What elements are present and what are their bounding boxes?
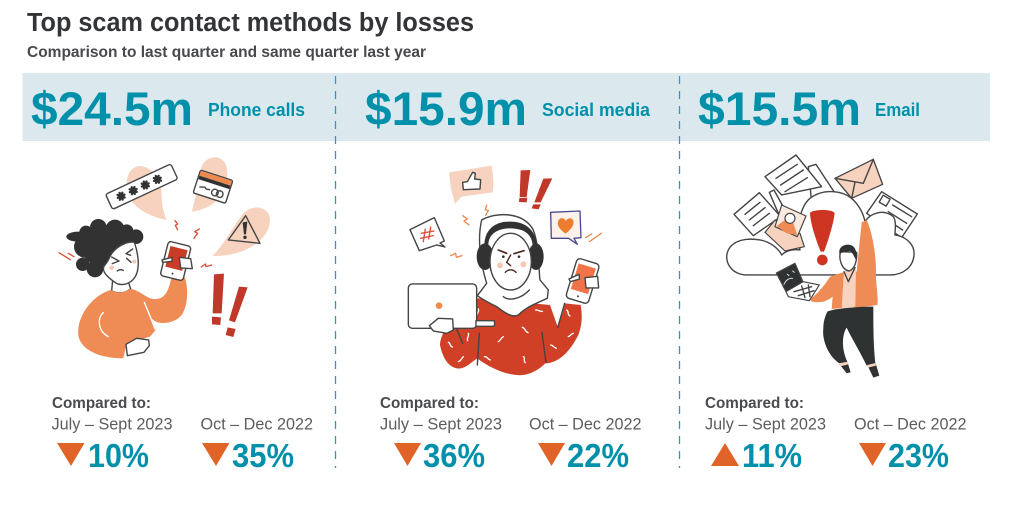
comparison: social media: July – Sept 2023 [380,416,502,434]
comparison: social media: 22% [567,437,629,474]
amount: email: $15.5m [698,82,861,135]
panel: social media [365,82,651,474]
comparison: social media: 36% [423,437,485,474]
illustration: person under a cloud of emails [727,155,917,378]
amount: phone calls: $24.5m [31,82,193,135]
panel: phone calls [31,82,313,474]
subtitle: Comparison to last quarter and same quarter last year [27,44,426,61]
comparison: social media [380,395,642,474]
comparison: phone calls: 10% [88,437,149,474]
header band [22,73,990,141]
title: Top scam contact methods by losses [27,9,474,37]
amount: social media: $15.9m [365,82,527,135]
label: email: Email [875,100,920,120]
comparison: phone calls [52,395,313,474]
panel: email [698,82,966,474]
comparison: phone calls: 35% [232,437,294,474]
comparison: email: 11% [742,437,802,474]
label: phone calls: Phone calls [208,100,305,120]
comparison: email: 23% [888,437,949,474]
illustration: distressed person on phone [59,157,270,358]
comparison: email: July – Sept 2023 [705,416,826,434]
illustration: angry person with headphones, laptop and phone [408,166,601,375]
label: social media: Social media [542,100,651,120]
comparison: phone calls: Oct – Dec 2022 [200,416,313,434]
comparison: phone calls: July – Sept 2023 [52,416,172,434]
comparison: email [705,395,966,474]
comparison: phone calls: Compared to: [52,395,151,412]
comparison: social media: Compared to: [380,395,479,412]
comparison: email: Compared to: [705,395,804,412]
comparison: social media: Oct – Dec 2022 [529,416,642,434]
comparison: email: Oct – Dec 2022 [854,416,966,434]
